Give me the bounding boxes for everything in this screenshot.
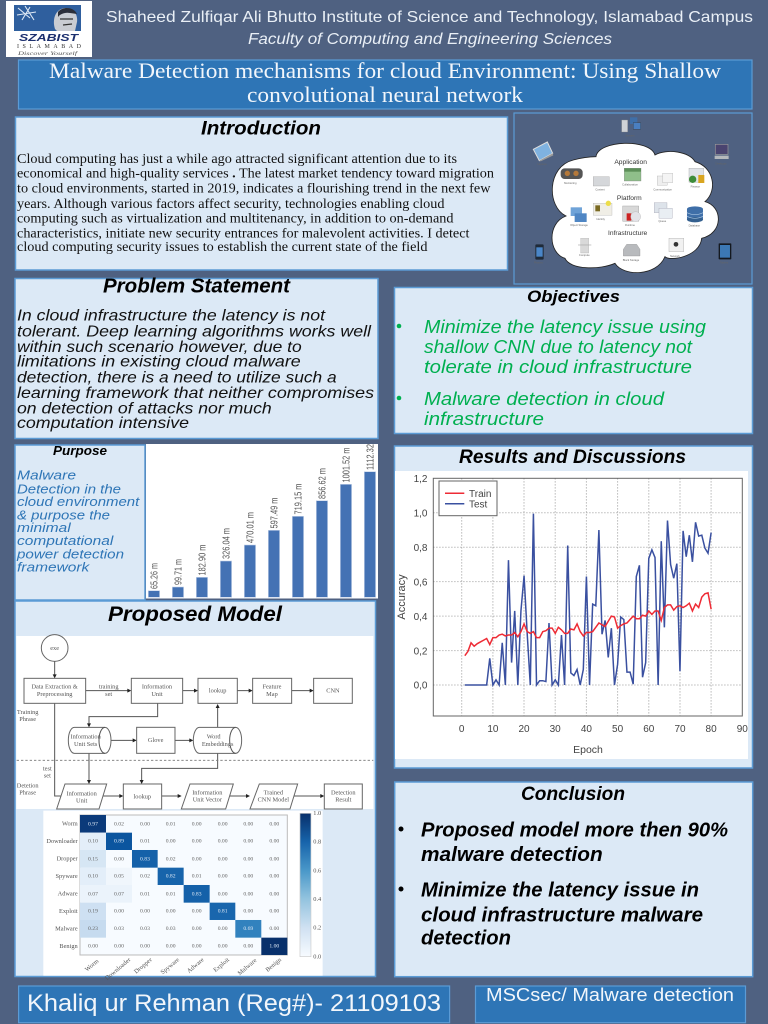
- heatmap column labels: Exploit: [212, 956, 231, 974]
- heatmap cell values: 0.00: [243, 839, 253, 845]
- problem statement heading: Problem Statement: [103, 276, 291, 298]
- heatmap cell values: 0.00: [269, 839, 279, 845]
- flow diagram: Information: [192, 790, 223, 797]
- chart x axis ticks: 20: [518, 724, 530, 735]
- chart legend: Test: [469, 500, 488, 510]
- title banner: [18, 58, 752, 109]
- flow diagram: lookup: [209, 688, 226, 695]
- heatmap cell values: 0.10: [88, 874, 98, 880]
- chart x axis ticks: [459, 724, 748, 735]
- chart legend: [439, 481, 497, 516]
- flow diagram: Phrase: [19, 790, 36, 797]
- panel: purpose: [15, 444, 145, 600]
- heatmap cell values: 0.83: [140, 856, 150, 862]
- heatmap cell values: 0.00: [243, 821, 253, 827]
- heatmap row labels: Downloader: [46, 838, 79, 845]
- chart legend: Train: [469, 489, 491, 500]
- cloud icon captions: Network: [670, 254, 681, 258]
- chart x axis ticks: 50: [612, 724, 624, 735]
- flow diagram: set: [105, 691, 112, 698]
- cloud icon captions: Laptops: [537, 162, 547, 166]
- flow diagram: Unit: [151, 691, 163, 698]
- heatmap cell values: 0.81: [218, 909, 228, 915]
- faculty heading: Faculty of Computing and Engineering Sciences: [248, 31, 612, 48]
- heatmap cell values: 0.00: [192, 856, 202, 862]
- conclusion bullet list: [398, 820, 728, 949]
- heatmap cell values: 0.00: [192, 821, 202, 827]
- chart y axis ticks: 0,4: [414, 612, 428, 623]
- bar chart: market growth: [146, 444, 378, 598]
- heatmap column labels: Spyware: [159, 956, 181, 976]
- bar value labels: 719.15 m: [294, 484, 304, 514]
- heatmap cell values: 0.05: [114, 874, 124, 880]
- panel: cloud computing diagram: [514, 113, 752, 284]
- heatmap column labels: Worm: [84, 958, 100, 973]
- chart x axis ticks: 60: [643, 724, 655, 735]
- heatmap cell values: 0.00: [114, 909, 124, 915]
- heatmap cell values: 0.00: [218, 926, 228, 932]
- chart y axis ticks: 0,8: [414, 543, 428, 554]
- purpose body text: [16, 467, 141, 574]
- programme box: [476, 985, 746, 1023]
- chart x axis ticks: 0: [459, 724, 465, 735]
- train accuracy line: [465, 593, 711, 656]
- heatmap cell values: 0.03: [114, 926, 124, 932]
- introduction body text: years. Although various factors affect security, technologies enabling cloud: [17, 196, 445, 211]
- introduction body text: Cloud computing has just a while ago attracted significant attention due to its: [17, 151, 457, 166]
- objectives bullet list: infrastructure: [424, 409, 544, 429]
- chart x axis ticks: 90: [737, 724, 748, 735]
- bar value labels: 597.49 m: [270, 498, 280, 528]
- heatmap cell values: 0.00: [218, 874, 228, 880]
- heatmap cell values: 0.00: [114, 856, 124, 862]
- heatmap cell values: 0.00: [218, 891, 228, 897]
- heatmap column labels: Adware: [186, 956, 206, 975]
- cloud icon captions: Runtime: [625, 223, 635, 227]
- chart axis titles: Epoch: [573, 744, 603, 756]
- flow diagram: Unit Vector: [193, 797, 223, 804]
- heatmap cell values: 0.19: [88, 909, 98, 915]
- heatmap cell values: 0.00: [269, 856, 279, 862]
- heatmap cell values: 0.82: [166, 874, 176, 880]
- heatmap cell values: 0.01: [192, 874, 202, 880]
- heatmap cell values: 0.00: [243, 856, 253, 862]
- heatmap cell values: 0.23: [88, 926, 98, 932]
- heatmap cell values: 0.00: [269, 909, 279, 915]
- heatmap cell values: 0.03: [166, 926, 176, 932]
- problem statement body text: tolerant. Deep learning algorithms works well: [17, 324, 371, 341]
- heatmap cell values: 0.01: [140, 839, 150, 845]
- heatmap cell values: 0.01: [166, 891, 176, 897]
- chart axis titles: Accuracy: [396, 574, 408, 620]
- heatmap cell values: 0.00: [218, 821, 228, 827]
- heatmap cell values: 0.00: [192, 839, 202, 845]
- problem statement body text: within such scenario however, due to: [17, 339, 302, 356]
- flow diagram: Word: [207, 734, 221, 741]
- heatmap row labels: Spyware: [56, 873, 78, 880]
- heatmap cell values: 0.00: [243, 909, 253, 915]
- heatmap cell values: 0.00: [88, 944, 98, 950]
- purpose body text: & purpose the: [17, 507, 110, 522]
- objectives bullet list: Malware detection in cloud: [424, 389, 665, 409]
- chart grid: [433, 478, 742, 716]
- heatmap cell values: 0.00: [243, 891, 253, 897]
- line chart: accuracy per epoch: [395, 471, 748, 759]
- bar value labels: 326.04 m: [222, 528, 232, 559]
- flow diagram: Preprocessing: [37, 691, 73, 698]
- introduction body text: economical and high-quality services . The latest market tendency toward migration: [17, 166, 494, 180]
- panel: conclusion: [395, 782, 753, 977]
- conclusion bullet list: Proposed model more then 90%: [421, 820, 728, 842]
- chart axes frame: [433, 478, 742, 716]
- bar value labels: [150, 444, 376, 589]
- cloud icon captions: Queue: [658, 219, 667, 223]
- flow diagram: Information: [67, 790, 98, 797]
- introduction body text: cloud computing security issues to establish the current state of the field: [17, 239, 428, 254]
- problem statement body text: learning framework that neither compromises: [17, 385, 374, 402]
- introduction body text: [17, 151, 494, 254]
- chart y axis ticks: 0,0: [414, 680, 428, 692]
- purpose body text: framework: [17, 559, 91, 574]
- flow diagram: [16, 635, 373, 809]
- introduction body text: characteristics, initiate new security entrances for malevolent activities. I detect: [17, 226, 470, 240]
- objectives bullet list: [397, 317, 706, 429]
- flow diagram: Embeddings: [202, 741, 234, 748]
- results heading: Results and Discussions: [459, 447, 686, 468]
- heatmap column labels: Downloader: [104, 956, 133, 982]
- heatmap cell values: 0.00: [140, 821, 150, 827]
- flow diagram: exe: [50, 645, 59, 652]
- bar value labels: 182.90 m: [198, 544, 208, 576]
- programme box: MSCsec/ Malware detection: [486, 985, 734, 1005]
- conclusion bullet list: detection: [421, 927, 511, 949]
- cloud layer labels: Application: [614, 159, 647, 166]
- heatmap column labels: [84, 956, 284, 982]
- problem statement body text: [17, 308, 374, 432]
- heatmap cell values: 0.00: [192, 909, 202, 915]
- title banner: Malware Detection mechanisms for cloud Environment: Using Shallow: [49, 58, 721, 83]
- confusion matrix heatmap: [43, 810, 323, 982]
- flow diagram: Detection: [331, 790, 356, 797]
- heatmap column labels: Malware: [237, 957, 258, 977]
- heatmap cell values: 0.83: [192, 891, 202, 897]
- heatmap cell values: 0.02: [140, 874, 150, 880]
- cloud icon captions: Communication: [653, 187, 672, 191]
- heatmap cell values: 0.00: [269, 821, 279, 827]
- heatmap colour scale: 0.0: [313, 953, 321, 960]
- flow diagram: set: [44, 773, 51, 780]
- bar value labels: 65.26 m: [150, 563, 160, 589]
- heatmap colour scale: [300, 810, 322, 960]
- chart x axis ticks: 70: [674, 724, 686, 735]
- flow diagram: Unit Sets: [74, 741, 98, 748]
- flow diagram: CNN: [326, 688, 340, 695]
- introduction body text: to cloud environments, started in 2019, indicates a flourishing trend in the next few: [17, 180, 491, 196]
- conclusion heading: Conclusion: [521, 784, 625, 805]
- heatmap cell values: 0.00: [218, 856, 228, 862]
- heatmap cell values: 0.02: [114, 821, 124, 827]
- logo: SZABIST Islamabad: SZABIST: [19, 32, 80, 44]
- cloud layer labels: [608, 159, 648, 237]
- flow diagram: Unit: [76, 798, 88, 805]
- cloud shape: [552, 143, 718, 273]
- author name box: [19, 986, 450, 1023]
- author name box: Khaliq ur Rehman (Reg#)- 21109103: [27, 990, 441, 1017]
- purpose body text: computational: [17, 533, 115, 548]
- heatmap cell values: 0.00: [243, 874, 253, 880]
- flow diagram: lookup: [134, 793, 151, 800]
- chart y axis ticks: 0,2: [414, 646, 428, 658]
- heatmap cell values: 0.03: [140, 926, 150, 932]
- flow diagram: Map: [266, 691, 278, 698]
- objectives heading: Objectives: [527, 287, 620, 306]
- panel: problem statement: [15, 276, 378, 438]
- problem statement body text: on detection of attacks nor much: [17, 400, 272, 417]
- cloud icon captions: Identity: [596, 217, 606, 221]
- heatmap cell values: 0.00: [218, 839, 228, 845]
- purpose body text: cloud environment: [17, 494, 141, 509]
- heatmap cell values: 1.00: [269, 944, 279, 950]
- cloud service icons: [533, 117, 731, 260]
- purpose body text: Detection in the: [17, 481, 121, 496]
- problem statement body text: computation intensive: [17, 415, 189, 432]
- problem statement body text: limitations in existing cloud malware: [17, 354, 301, 371]
- heatmap cell values: 0.10: [88, 839, 98, 845]
- heatmap cell values: 0.00: [192, 926, 202, 932]
- objectives bullet list: Minimize the latency issue using: [424, 317, 706, 337]
- heatmap cell values: 0.00: [114, 944, 124, 950]
- cloud icon captions: Monitoring: [564, 181, 577, 185]
- heatmap row labels: Worm: [62, 821, 78, 828]
- heatmap cell values: 0.00: [269, 891, 279, 897]
- heatmap row labels: Exploit: [59, 908, 78, 915]
- heatmap colour scale: 1.0: [313, 810, 321, 817]
- conclusion bullet list: Minimize the latency issue in: [421, 880, 699, 902]
- heatmap cell values: 0.00: [140, 944, 150, 950]
- heatmap cell values: 0.07: [114, 891, 124, 897]
- cloud icon captions: Content: [595, 188, 605, 192]
- panel: objectives: [394, 287, 752, 434]
- test accuracy line: [465, 514, 711, 685]
- logo: SZABIST Islamabad: [6, 1, 92, 57]
- heatmap colour scale: 0.8: [313, 839, 321, 846]
- chart y axis ticks: 0,6: [414, 578, 428, 588]
- chart y axis ticks: 1,2: [414, 474, 428, 485]
- problem statement body text: In cloud infrastructure the latency is not: [17, 308, 326, 325]
- conclusion bullet list: cloud infrastructure malware: [421, 905, 703, 927]
- cloud icon captions: Block Storage: [623, 258, 640, 262]
- heatmap cell values: 0.15: [88, 856, 98, 862]
- cloud layer labels: Infrastructure: [608, 230, 648, 237]
- chart x axis ticks: 40: [581, 724, 592, 735]
- chart axis titles: [396, 574, 603, 756]
- cloud icon captions: Desktops: [715, 162, 727, 166]
- heatmap cell values: 0.00: [166, 909, 176, 915]
- purpose heading: Purpose: [53, 444, 107, 458]
- proposed model heading: Proposed Model: [108, 602, 283, 626]
- heatmap cell values: 0.01: [140, 891, 150, 897]
- flow diagram: Result: [335, 797, 352, 804]
- heatmap cell values: 0.00: [140, 909, 150, 915]
- cloud icon captions: [534, 133, 729, 265]
- heatmap cell values: 0.69: [243, 926, 253, 932]
- heatmap cell values: 0.02: [166, 856, 176, 862]
- bar value labels: 1112.32: [366, 444, 376, 470]
- cloud icon captions: Collaboration: [622, 183, 638, 187]
- heatmap column labels: Benign: [264, 956, 284, 974]
- heatmap colour scale: 0.2: [313, 925, 321, 932]
- bar value labels: 1001.52 m: [342, 448, 352, 482]
- heatmap cell values: 0.01: [166, 821, 176, 827]
- bar value labels: 99.71 m: [174, 559, 184, 585]
- panel: proposed model: [15, 601, 376, 982]
- chart y axis ticks: 1,0: [414, 508, 428, 520]
- cloud icon captions: Phones: [534, 261, 544, 265]
- heatmap row labels: [46, 821, 79, 950]
- flow diagram: Detetion: [17, 783, 39, 790]
- title banner: convolutional neural network: [247, 82, 523, 107]
- chart x axis ticks: 80: [706, 724, 717, 735]
- flow diagram: Phrase: [19, 716, 36, 723]
- heatmap cell values: 0.89: [114, 839, 124, 845]
- heatmap cell values: 0.00: [166, 839, 176, 845]
- panel: introduction: [16, 117, 508, 270]
- heatmap cell values: 0.00: [166, 944, 176, 950]
- flow diagram: Information: [71, 734, 102, 741]
- flow diagram: training: [99, 684, 119, 691]
- heatmap cell values: 0.07: [88, 891, 98, 897]
- heatmap colour scale: 0.4: [313, 896, 322, 903]
- chart x axis ticks: 10: [487, 724, 499, 735]
- chart x axis ticks: 30: [550, 724, 561, 735]
- introduction body text: computing such as virtualization and multitenancy, in addition to on-demand: [17, 210, 454, 226]
- heatmap column labels: Dropper: [133, 956, 154, 975]
- flow diagram: Feature: [262, 684, 282, 691]
- heatmap row labels: Malware: [55, 925, 78, 932]
- panel: results and discussions: [394, 446, 752, 768]
- chart y axis ticks: [414, 474, 428, 692]
- flow diagram: Information: [142, 684, 173, 691]
- flow diagram: CNN Model: [258, 797, 289, 804]
- flow diagram: Glove: [148, 737, 164, 744]
- cloud icon captions: Object Storage: [570, 223, 588, 227]
- cloud icon captions: Database: [689, 224, 701, 228]
- bar value labels: 856.62 m: [318, 468, 328, 499]
- heatmap cell values: 0.00: [269, 874, 279, 880]
- flow diagram: Training: [17, 709, 39, 716]
- flow diagram: test: [43, 766, 52, 773]
- heatmap cell values: 0.00: [269, 926, 279, 932]
- heatmap highlighted cells: [80, 815, 287, 955]
- institute heading: Shaheed Zulfiqar Ali Bhutto Institute of Science and Technology, Islamabad Campus: [106, 9, 753, 26]
- heatmap cell values: 0.97: [88, 821, 98, 827]
- cloud icon captions: Tablets: [720, 260, 729, 264]
- heatmap row labels: Dropper: [57, 856, 79, 863]
- objectives bullet list: tolerate in cloud infrastructure: [424, 357, 692, 377]
- heatmap row labels: Benign: [59, 943, 78, 950]
- conclusion bullet list: malware detection: [421, 844, 603, 866]
- purpose body text: Malware: [17, 467, 76, 482]
- cloud layer labels: Platform: [617, 195, 642, 202]
- heatmap row labels: Adware: [58, 891, 78, 898]
- introduction heading: Introduction: [201, 118, 321, 140]
- cloud icon captions: Compute: [579, 253, 590, 257]
- cloud icon captions: Servers: [625, 133, 635, 137]
- flow diagram: Trained: [264, 790, 284, 797]
- purpose body text: minimal: [17, 520, 72, 535]
- bars: [148, 472, 376, 597]
- heatmap cell values: 0.00: [218, 944, 228, 950]
- heatmap cell values: [88, 821, 279, 950]
- bar value labels: 470.01 m: [246, 512, 256, 543]
- heatmap colour scale: 0.6: [313, 867, 321, 874]
- objectives bullet list: shallow CNN due to latency not: [424, 337, 693, 357]
- logo: SZABIST Islamabad: ISLAMABAD: [17, 44, 82, 50]
- heatmap cell values: 0.00: [192, 944, 202, 950]
- logo: SZABIST Islamabad: Discover Yourself: [16, 50, 79, 57]
- flow diagram: Data Extraction &: [31, 684, 78, 691]
- heatmap cell values: 0.00: [243, 944, 253, 950]
- cloud icon captions: Finance: [691, 185, 701, 189]
- purpose body text: power detection: [16, 547, 124, 562]
- problem statement body text: detection, there is a need to utilize such a: [17, 369, 337, 386]
